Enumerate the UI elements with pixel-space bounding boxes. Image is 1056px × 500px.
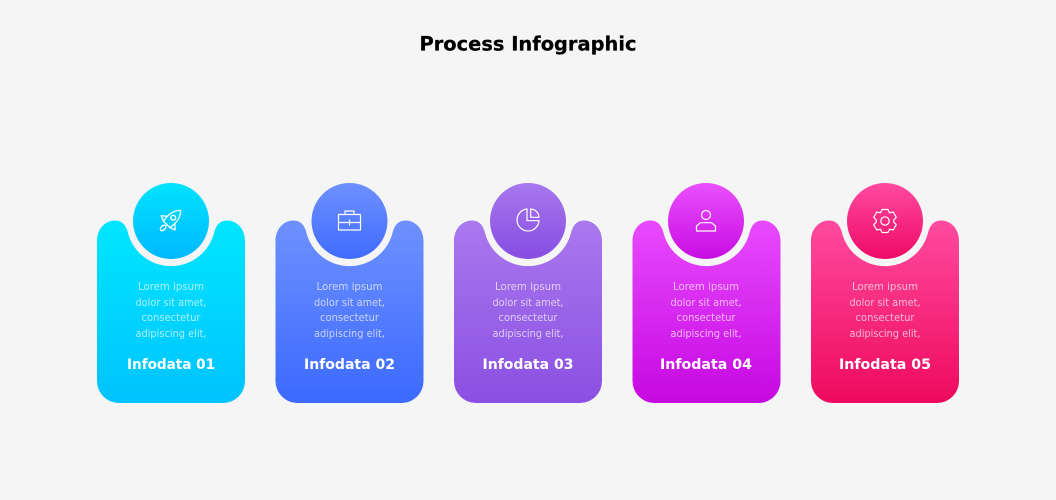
description 04: dolor sit amet,: [670, 298, 742, 309]
panel: Infodata 05: [811, 183, 959, 403]
description 05: [850, 282, 920, 340]
label 01: Infodata 01: [127, 356, 215, 373]
description 03: [492, 282, 564, 340]
circle badge 04: [668, 183, 744, 259]
icon: rocket: [154, 203, 188, 237]
description 04: [670, 282, 742, 340]
icon: briefcase: [338, 211, 360, 230]
description 03: adipiscing elit,: [492, 329, 564, 340]
circle badge 05: [847, 183, 923, 259]
panel: Infodata 01: [97, 183, 245, 403]
description 01: adipiscing elit,: [136, 329, 206, 340]
card shape 01: [97, 220, 245, 403]
description 03: Lorem ipsum: [495, 282, 561, 293]
card shape 05: [811, 220, 959, 403]
description 02: dolor sit amet,: [314, 298, 385, 309]
description 02: [314, 282, 385, 340]
description 05: Lorem ipsum: [852, 282, 918, 293]
description 03: consectetur: [498, 313, 558, 324]
description 02: Lorem ipsum: [316, 282, 383, 293]
description 01: consectetur: [142, 313, 201, 324]
title: Process Infographic: [420, 32, 636, 56]
circle badge 03: [490, 183, 566, 259]
description 01: Lorem ipsum: [138, 282, 204, 293]
icon: pie chart: [517, 209, 539, 231]
description 05: consectetur: [856, 313, 915, 324]
circle badge 02: [312, 183, 388, 259]
description 04: consectetur: [676, 313, 736, 324]
description 04: adipiscing elit,: [670, 329, 742, 340]
icon: gear: [874, 210, 896, 232]
circle badge 01: [133, 183, 209, 259]
description 05: dolor sit amet,: [850, 298, 920, 309]
description 02: consectetur: [320, 313, 380, 324]
label 02: Infodata 02: [304, 356, 395, 373]
description 01: [136, 282, 206, 340]
label 05: Infodata 05: [839, 356, 931, 373]
panel: Infodata 03: [454, 183, 602, 403]
description 05: adipiscing elit,: [850, 329, 920, 340]
label 03: Infodata 03: [482, 356, 574, 373]
icon: person: [696, 210, 716, 231]
description 01: dolor sit amet,: [136, 298, 206, 309]
card shape 04: [632, 220, 780, 403]
card shape 02: [276, 220, 424, 403]
description 04: Lorem ipsum: [673, 282, 739, 293]
label 04: Infodata 04: [660, 356, 752, 373]
description 03: dolor sit amet,: [492, 298, 564, 309]
panel: Infodata 02: [276, 183, 424, 403]
panel: Infodata 04: [632, 183, 780, 403]
card shape 03: [454, 220, 602, 403]
description 02: adipiscing elit,: [314, 329, 385, 340]
